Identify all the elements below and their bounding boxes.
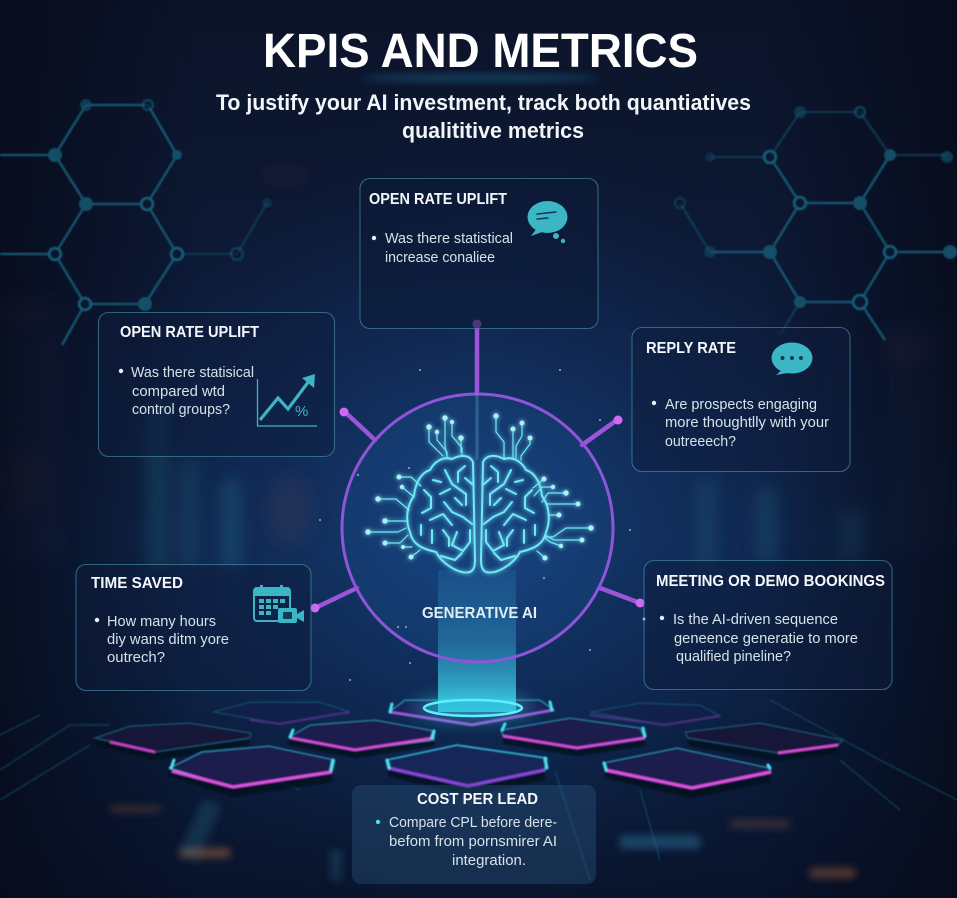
panel: cost per lead bbox=[352, 785, 596, 884]
icon: speech bubble bbox=[772, 342, 812, 375]
hexagon network: left bbox=[0, 99, 272, 345]
panel: open rate uplift (top) bbox=[360, 178, 598, 328]
title glow bbox=[360, 74, 600, 82]
icon: calendar and video camera bbox=[254, 585, 304, 623]
panel: cost per lead: COST PER LEAD bbox=[417, 791, 538, 808]
decorative sparkles bbox=[319, 369, 646, 681]
panel: time saved bbox=[76, 564, 311, 690]
panel: open rate uplift (left) bbox=[98, 312, 334, 456]
hex platform tiles bbox=[95, 700, 843, 798]
panel: reply rate: REPLY RATE bbox=[646, 340, 736, 357]
panel: open rate uplift (left): Was there statisical bbox=[131, 365, 254, 381]
panel: cost per lead: Compare CPL before dere- bbox=[389, 815, 557, 831]
panel: meeting or demo bookings: Is the AI-driven sequence bbox=[673, 612, 838, 628]
panel: cost per lead: befom from pornsmirer AI bbox=[389, 834, 557, 850]
panel: cost per lead: integration. bbox=[452, 853, 526, 869]
label: generative AI: GENERATIVE AI bbox=[422, 605, 537, 622]
panel: time saved: outrech? bbox=[107, 650, 165, 666]
panel: open rate uplift (left): control groups? bbox=[132, 402, 230, 418]
connector lines bbox=[315, 325, 640, 608]
panel: time saved: TIME SAVED bbox=[91, 575, 183, 592]
panel: time saved: diy wans ditm yore bbox=[107, 632, 229, 648]
icon: growth chart bbox=[258, 374, 317, 426]
subtitle: qualititive metrics bbox=[402, 118, 584, 143]
panel: reply rate bbox=[632, 328, 850, 472]
circuit floor bbox=[0, 700, 957, 880]
panel: reply rate: Are prospects engaging bbox=[665, 397, 817, 413]
panel: meeting or demo bookings: qualified pineline? bbox=[676, 649, 791, 665]
panel: reply rate: outreeech? bbox=[665, 434, 736, 450]
title: KPIS AND METRICS bbox=[263, 25, 698, 78]
panel: open rate uplift (top): OPEN RATE UPLIFT bbox=[369, 191, 507, 208]
panel: reply rate: more thoughtlly with your bbox=[665, 415, 829, 431]
connector end nodes bbox=[310, 320, 644, 612]
central hologram beam bbox=[413, 570, 533, 720]
panel: open rate uplift (left): compared wtd bbox=[132, 384, 225, 400]
subtitle: To justify your AI investment, track both quantiatives bbox=[216, 90, 751, 115]
panel: meeting or demo bookings: MEETING OR DEMO BOOKINGS bbox=[656, 573, 885, 590]
icon: thought bubble bbox=[528, 201, 568, 243]
panel: open rate uplift (left): OPEN RATE UPLIFT bbox=[120, 324, 259, 341]
icon: brain with circuit nodes bbox=[365, 413, 594, 572]
subtitle bbox=[216, 90, 751, 143]
central circle bbox=[342, 393, 613, 662]
icon: growth chart: % bbox=[295, 403, 308, 420]
hexagon network: right bbox=[675, 106, 957, 340]
panel: meeting or demo bookings bbox=[644, 560, 892, 690]
panel: open rate uplift (top): increase conaliee bbox=[385, 250, 495, 266]
panel: open rate uplift (top): Was there statistical bbox=[385, 231, 513, 247]
panel: time saved: How many hours bbox=[107, 614, 216, 630]
panel: meeting or demo bookings: geneence generatie to more bbox=[674, 631, 858, 647]
